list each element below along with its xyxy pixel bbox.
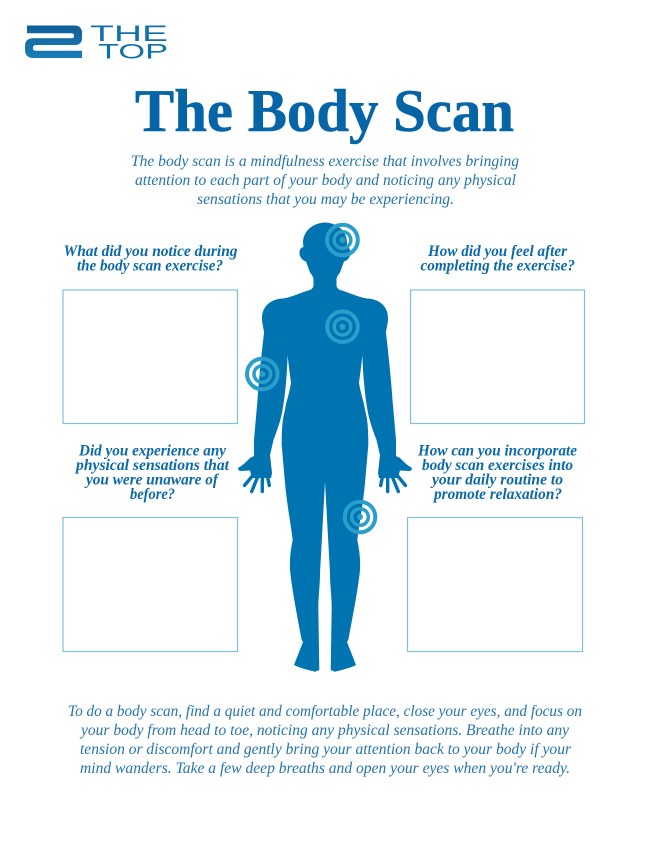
question: physical sensations (74, 442, 230, 503)
closing instructions: mind wanders. Take a few deep breaths and open your eyes when you're ready. (80, 760, 570, 777)
left half of body (238, 222, 326, 672)
closing instructions: tension or discomfort and gently bring your attention back to your body if your (80, 741, 572, 758)
answer box 1 (63, 290, 238, 424)
target marker: head (327, 225, 358, 255)
question: incorporate body scan: body scan exercises into (422, 457, 573, 474)
question: incorporate body scan: How can you incorporate (417, 442, 577, 460)
question: incorporate body scan: promote relaxation? (432, 486, 562, 503)
question: incorporate body scan (417, 442, 577, 503)
target marker: arm (247, 359, 278, 389)
answer box 3 (63, 518, 238, 652)
closing instructions: To do a body scan, find a quiet and comfortable place, close your eyes, and focus on (68, 703, 582, 720)
body silhouette (238, 222, 412, 672)
logo wordmark TOP: TOP (98, 40, 168, 64)
question: what did you notice (64, 243, 238, 274)
answer box 2 (410, 290, 584, 424)
question: how did you feel: How did you feel after (427, 243, 568, 260)
intro text: attention to each part of your body and noticing any physical (135, 172, 517, 189)
intro text (131, 153, 519, 208)
logo wordmark THE: THE (90, 21, 168, 46)
question: physical sensations: before? (130, 486, 175, 503)
question: what did you notice: What did you notice during (64, 243, 238, 260)
target marker: leg (345, 502, 375, 532)
intro text: sensations that you may be experiencing. (197, 191, 454, 208)
right half of body (324, 222, 412, 672)
closing instructions: your body from head to toe, noticing any physical sensations. Breathe into any (79, 722, 570, 739)
question: what did you notice: the body scan exercise? (77, 258, 223, 274)
question: incorporate body scan: your daily routine to (430, 472, 563, 488)
target marker: chest (327, 311, 358, 342)
question: how did you feel (420, 243, 575, 274)
question: physical sensations: Did you experience any (78, 442, 226, 460)
title: The Body Scan (135, 78, 514, 144)
question: physical sensations: physical sensations that (74, 457, 230, 474)
question: how did you feel: completing the exercise? (420, 258, 575, 274)
answer box 4 (408, 518, 582, 652)
intro text: The body scan is a mindfulness exercise that involves bringing (131, 153, 519, 170)
closing instructions (68, 703, 582, 777)
logo (25, 21, 168, 64)
logo mark: numeral 2 (25, 26, 82, 58)
question: physical sensations: you were unaware of (84, 472, 220, 488)
